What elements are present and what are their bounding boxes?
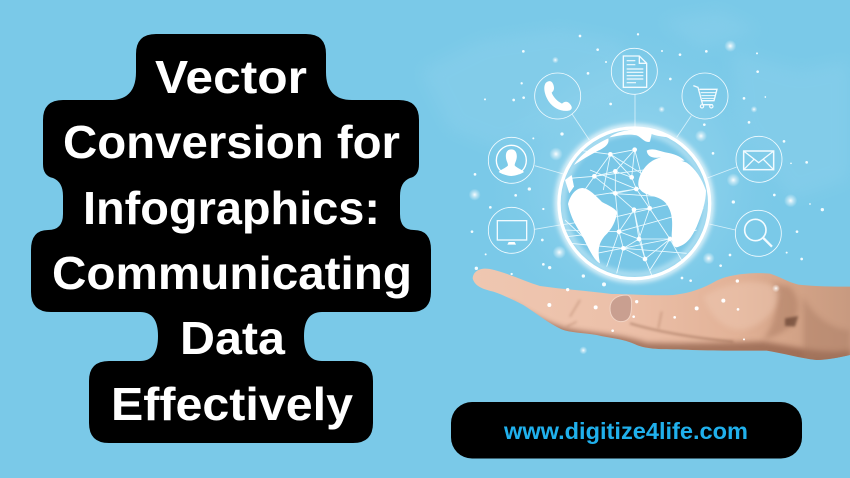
- network lines: [560, 150, 703, 275]
- globe: [558, 127, 711, 280]
- connector lines: [535, 95, 737, 230]
- hand shading: [532, 310, 850, 360]
- thumbnail: [610, 295, 632, 322]
- sparkles: [469, 40, 797, 354]
- icon: envelope: [736, 136, 782, 182]
- title text: Conversion for: [63, 116, 400, 168]
- inner rim shade: [563, 132, 706, 275]
- icon: phone: [535, 73, 581, 119]
- hand: [473, 269, 850, 367]
- title block: [31, 34, 431, 443]
- icon: person: [488, 137, 534, 183]
- icon: magnifier: [735, 210, 781, 256]
- title background shape: [31, 34, 431, 443]
- glow behind globe: [478, 20, 791, 333]
- faint world map backdrop: [420, 10, 850, 200]
- network nodes: [592, 147, 672, 261]
- icon: document: [611, 48, 657, 94]
- title text: Vector: [155, 51, 307, 103]
- title text: Data: [180, 312, 285, 364]
- title text: Effectively: [111, 378, 353, 430]
- globe ring: [559, 128, 710, 279]
- continents: [565, 129, 706, 263]
- title text: Infographics:: [83, 182, 380, 234]
- website url: www.digitize4life.com: [503, 418, 748, 444]
- icon: shopping cart: [682, 73, 728, 119]
- title text: Communicating: [52, 247, 412, 299]
- title text: [52, 51, 412, 430]
- hero illustration: globe with icons on a hand: [469, 20, 850, 367]
- hand sparkles: [547, 279, 780, 340]
- globe glow: [558, 127, 711, 280]
- website pill: [451, 402, 802, 458]
- star dots: [471, 33, 824, 286]
- icon: monitor: [488, 207, 534, 253]
